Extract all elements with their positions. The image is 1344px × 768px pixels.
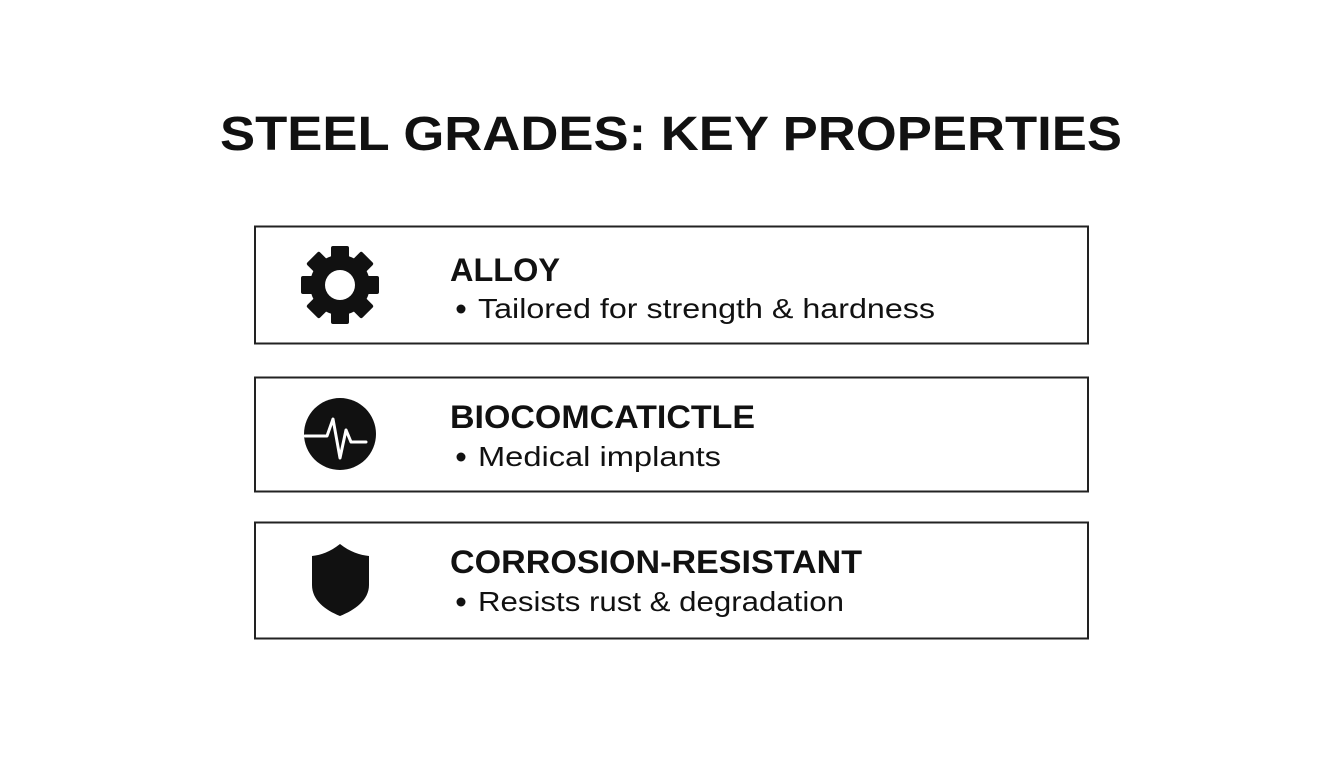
bullet text: Resists rust & degradation bbox=[478, 586, 844, 617]
heading: alloy: ALLOY bbox=[450, 252, 560, 288]
panel: biocompatible bbox=[255, 378, 1088, 492]
icon: gear bbox=[301, 246, 379, 324]
bullet text: Medical implants bbox=[478, 441, 721, 472]
bullet text: Tailored for strength & hardness bbox=[478, 293, 935, 324]
panel: corrosion-resistant bbox=[255, 522, 1088, 638]
heading: biocomcaticle: BIOCOMCATICTLE bbox=[450, 399, 755, 435]
panel: alloy bbox=[255, 226, 1088, 344]
icon: shield bbox=[312, 544, 369, 616]
title: STEEL GRADES: KEY PROPERTIES bbox=[220, 108, 1122, 161]
heading: corrosion-resistant: CORROSION-RESISTANT bbox=[450, 544, 862, 580]
icon: heartbeat circle bbox=[304, 398, 376, 470]
